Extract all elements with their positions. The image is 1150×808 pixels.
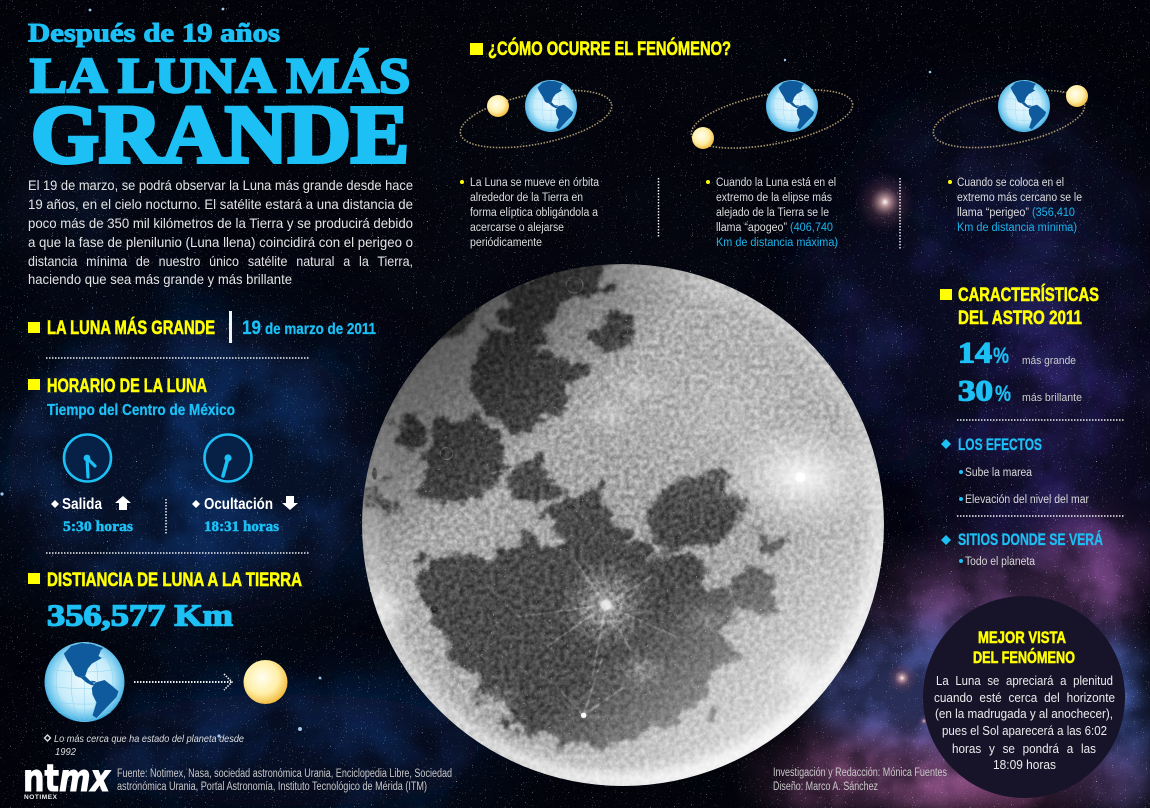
panel: places bbox=[941, 530, 1103, 568]
stat: 14 percent bbox=[958, 336, 1076, 370]
text: perigee bbox=[948, 177, 1082, 234]
sources: astronómica Urania, Portal Astronomía, Instituto Tecnológico de Mérida (ITM) bbox=[117, 781, 427, 793]
stat: 30 percent bbox=[958, 374, 1082, 408]
stat: 14 percent: más grande bbox=[1022, 355, 1076, 367]
title block bbox=[28, 18, 410, 180]
label: moonset bbox=[192, 496, 298, 535]
distance value: 356,577 Km bbox=[47, 598, 233, 632]
intro paragraph: poco más de 350 mil kilómetros de la Tierra y se producirá debido bbox=[28, 215, 413, 231]
diagram: orbit 2 bbox=[687, 79, 857, 159]
stat: 14 percent: 14 bbox=[958, 336, 992, 370]
icon: moon bbox=[244, 660, 288, 704]
date heading bbox=[28, 311, 376, 343]
panel: moon schedule bbox=[28, 375, 298, 535]
callout: best view: horas y se pondrá a las bbox=[952, 741, 1096, 756]
date heading: LA LUNA MÁS GRANDE bbox=[47, 316, 215, 339]
arrow: earth to moon bbox=[134, 674, 232, 690]
main title line 1: LA LUNA MÁS bbox=[30, 47, 410, 103]
intro paragraph: El 19 de marzo, se podrá observar la Luna más grande desde hace bbox=[28, 177, 413, 193]
bright highlands and crater rays bbox=[371, 346, 870, 708]
panel: effects: LOS EFECTOS bbox=[958, 435, 1042, 454]
text: orbit description: alrededor de la Tierra en bbox=[470, 192, 583, 204]
moon photograph bbox=[357, 255, 885, 786]
label: moonset: Ocultación bbox=[204, 496, 273, 513]
text: perigee: Km de distancia mínima) bbox=[957, 222, 1077, 234]
callout: best view: pues el Sol aparecerá a las 6:02 bbox=[942, 723, 1107, 738]
callout: best view: (en la madrugada y al anochecer), bbox=[935, 706, 1113, 721]
intro paragraph: 19 años, en el cielo nocturno. El satélite estará a una distancia de bbox=[28, 196, 413, 212]
text: apogee bbox=[706, 177, 838, 249]
text: orbit description: La Luna se mueve en órbita bbox=[470, 177, 600, 189]
text: apogee: llama “apogeo” bbox=[716, 222, 787, 234]
panel: how it happens bbox=[456, 36, 1089, 250]
lunar maria bbox=[366, 255, 783, 746]
panel: effects: Elevación del nivel del mar bbox=[965, 494, 1089, 506]
main title line 2: GRANDE bbox=[31, 88, 409, 180]
callout: best view: cuando esté cerca del horizonte bbox=[934, 690, 1115, 705]
text: orbit description: acercarse o alejarse bbox=[470, 222, 564, 234]
callout: best view: La Luna se apreciará a plenitud bbox=[936, 673, 1113, 688]
intro paragraph: a que la fase de plenilunio (Luna llena) coincidirá con el perigeo o bbox=[28, 234, 413, 250]
panel: characteristics bbox=[940, 283, 1099, 408]
logo: notimex: ntmx bbox=[23, 757, 111, 800]
stat: 30 percent: más brillante bbox=[1022, 392, 1082, 404]
panel: distance bbox=[28, 569, 302, 722]
text: perigee: llama “perigeo” bbox=[957, 207, 1029, 219]
diagram: orbit 1 bbox=[456, 80, 616, 158]
note: 1992 bbox=[55, 746, 76, 758]
stat: 30 percent: 30 bbox=[958, 374, 993, 408]
label: moonrise: 5:30 horas bbox=[63, 519, 133, 535]
label: moonset: 18:31 horas bbox=[204, 519, 279, 535]
icon: clock moonset bbox=[204, 434, 252, 482]
intro paragraph: distancia mínima de nuestro único satélite natural a la Tierra, bbox=[28, 253, 413, 269]
logo: notimex: NOTIMEX bbox=[24, 794, 58, 801]
text: apogee: Cuando la Luna está en el bbox=[716, 177, 836, 189]
panel: moon schedule: HORARIO DE LA LUNA bbox=[47, 375, 207, 397]
text: perigee: Cuando se coloca en el bbox=[957, 177, 1064, 189]
panel: distance: DISTIANCIA DE LUNA A LA TIERRA bbox=[47, 569, 302, 591]
stat: 14 percent: % bbox=[993, 343, 1009, 368]
label: moonrise: Salida bbox=[62, 496, 102, 513]
stat: 30 percent: % bbox=[995, 381, 1011, 406]
callout: best view: 18:09 horas bbox=[993, 757, 1056, 772]
icon: earth bbox=[44, 642, 124, 722]
text: orbit description: periódicamente bbox=[470, 237, 542, 249]
panel: characteristics: DEL ASTRO 2011 bbox=[958, 307, 1082, 329]
text: orbit description bbox=[460, 177, 600, 249]
heading: ¿CÓMO OCURRE EL FENÓMENO? bbox=[488, 36, 731, 60]
credits: Investigación y Redacción: Mónica Fuentes bbox=[773, 767, 947, 779]
text: apogee: (406,740 bbox=[790, 222, 833, 234]
panel: places: Todo el planeta bbox=[965, 556, 1036, 568]
subtitle: Después de 19 años bbox=[28, 18, 280, 48]
callout: best view: MEJOR VISTA bbox=[978, 629, 1066, 647]
text: apogee: Km de distancia máxima) bbox=[716, 237, 838, 249]
callout: best view: DEL FENÓMENO bbox=[973, 648, 1075, 667]
text: apogee: extremo de la elipse más bbox=[716, 192, 832, 204]
callout: best view bbox=[923, 596, 1125, 798]
text: perigee: (356,410 bbox=[1032, 207, 1075, 219]
date heading: 19 bbox=[242, 318, 261, 339]
credits bbox=[773, 767, 947, 793]
panel: effects: Sube la marea bbox=[965, 467, 1033, 479]
intro paragraph: haciendo que sea más grande y más brillante bbox=[28, 271, 292, 287]
icon: clock moonrise bbox=[64, 434, 111, 482]
text: perigee: extremo más cercano se le bbox=[957, 192, 1082, 204]
label: moonrise bbox=[51, 496, 133, 535]
panel: effects bbox=[941, 435, 1089, 506]
panel: moon schedule: Tiempo del Centro de México bbox=[47, 402, 235, 419]
note bbox=[44, 733, 244, 758]
note: Lo más cerca que ha estado del planeta desde bbox=[54, 733, 244, 745]
sources bbox=[117, 768, 452, 793]
date heading: de marzo de 2011 bbox=[265, 321, 376, 338]
sources: Fuente: Notimex, Nasa, sociedad astronómica Urania, Enciclopedia Libre, Sociedad bbox=[117, 768, 452, 780]
heading bbox=[470, 36, 731, 60]
text: orbit description: forma elíptica obligándola a bbox=[470, 207, 599, 219]
intro paragraph bbox=[28, 177, 413, 287]
text: apogee: alejado de la Tierra se le bbox=[716, 207, 829, 219]
diagram: orbit 3 bbox=[929, 80, 1089, 158]
panel: characteristics: CARACTERÍSTICAS bbox=[958, 283, 1099, 306]
credits: Diseño: Marco A. Sánchez bbox=[773, 781, 878, 793]
